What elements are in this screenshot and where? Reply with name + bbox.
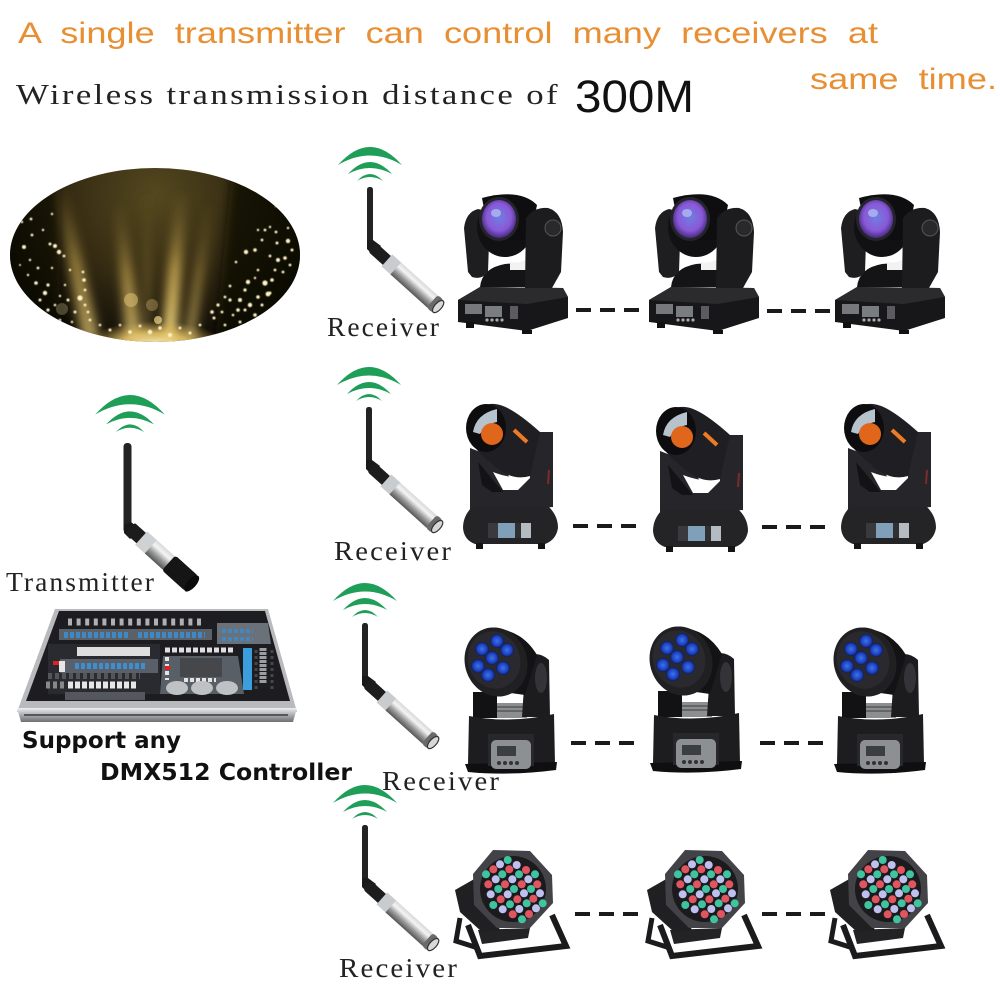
fixture 3 xyxy=(830,850,941,956)
oval light beam photo xyxy=(10,168,300,342)
fixture 2 xyxy=(640,618,742,773)
fixture 1 xyxy=(455,619,557,774)
dashed link xyxy=(571,742,634,744)
receiver 2 dongle xyxy=(365,407,445,535)
receiver 2 signal icon xyxy=(337,367,401,401)
label: Transmitter: Transmitter xyxy=(6,567,156,597)
dashed link xyxy=(762,913,825,915)
fixture 2 xyxy=(653,407,748,552)
fixture 1 xyxy=(455,850,566,956)
label: Receiver: Receiver xyxy=(382,766,501,796)
label: Receiver: Receiver xyxy=(334,536,453,566)
fixture 1 xyxy=(463,404,558,549)
receiver 4 dongle xyxy=(361,825,441,953)
fixture 3 xyxy=(824,619,926,774)
fixture 1 xyxy=(458,194,568,334)
row 1: beam moving heads xyxy=(327,147,945,342)
label: Receiver: Receiver xyxy=(339,953,459,983)
receiver 4 signal icon xyxy=(333,785,397,819)
dashed link xyxy=(767,310,830,312)
dashed link xyxy=(575,913,638,915)
caption: controller support: Support any xyxy=(22,728,181,754)
title: orange headline xyxy=(18,17,997,96)
label: Receiver: Receiver xyxy=(327,312,441,342)
dashed link xyxy=(760,742,823,744)
transmitter: wireless signal icon xyxy=(95,395,165,432)
dashed link xyxy=(573,525,636,527)
receiver 3 dongle xyxy=(361,623,441,751)
receiver 1 dongle xyxy=(366,187,446,315)
transmitter dongle xyxy=(123,443,202,594)
caption: controller support xyxy=(22,728,353,786)
fixture 3 xyxy=(841,404,936,549)
dashed link xyxy=(762,526,825,528)
row 3: LED wash moving heads xyxy=(333,583,926,796)
dashed link xyxy=(576,309,639,311)
heading: transmission distance: 300M xyxy=(575,71,694,122)
receiver 3 signal icon xyxy=(333,583,397,617)
caption: controller support: DMX512 Controller xyxy=(100,760,353,786)
heading: transmission distance: Wireless transmission distance of xyxy=(16,79,560,111)
DMX lighting console xyxy=(17,609,297,722)
title: orange headline: A single transmitter can control many receivers at xyxy=(18,17,879,50)
row 2: beam spot moving heads xyxy=(334,367,936,566)
fixture 2 xyxy=(647,850,758,956)
fixture 2 xyxy=(649,194,759,334)
receiver 1 signal icon xyxy=(338,147,402,181)
row 4: LED par lights xyxy=(333,785,941,983)
heading: transmission distance xyxy=(16,71,694,122)
fixture 3 xyxy=(835,194,945,334)
title: orange headline: same time. xyxy=(810,63,997,96)
